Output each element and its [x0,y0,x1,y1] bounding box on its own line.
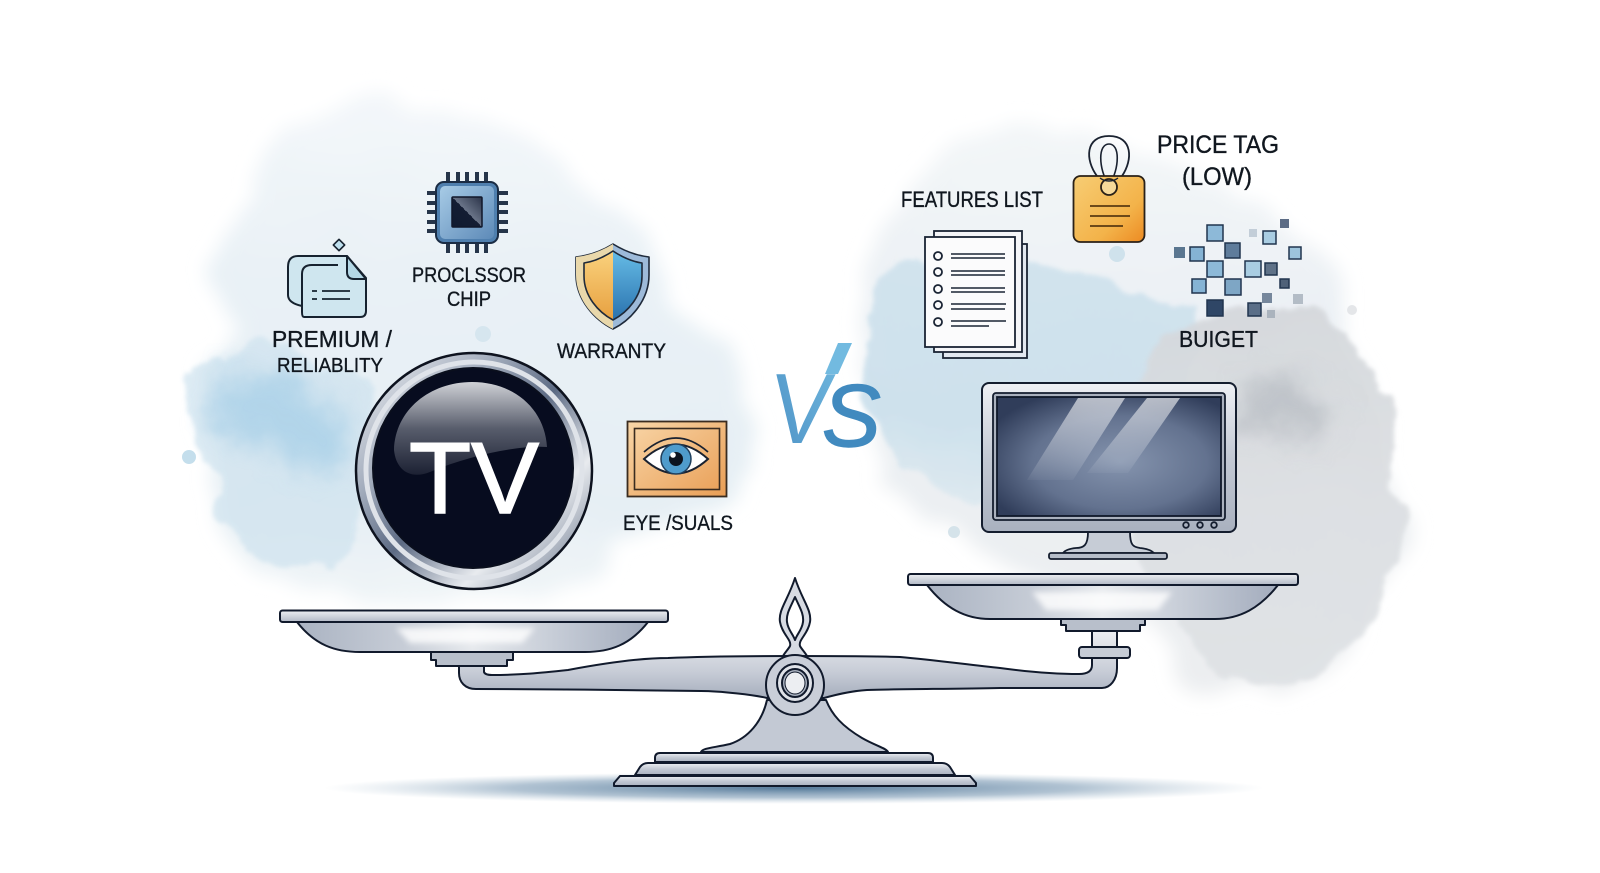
label: warranty: WARRANTY [557,340,666,363]
ground shadow [324,772,1264,804]
label: budget: BUIGET [1179,326,1258,352]
balance scale [280,574,1298,786]
scale beam [459,631,1117,698]
scale finial [780,578,810,660]
VS label: S [822,366,881,465]
icon: premium reliability document [288,239,366,317]
label: premium reliability [272,326,393,377]
icon: price tag [1074,136,1144,242]
icon: budget pixel squares [1174,219,1303,318]
icon: eye visuals [628,422,726,496]
icon: warranty shield [576,244,649,329]
icon: monitor [982,383,1236,559]
left pan [280,610,668,666]
VS label: V [764,353,839,465]
icon: TV badge [356,353,592,589]
VS label [764,343,881,465]
label: processor chip: CHIP [447,288,491,311]
scale stand [701,700,888,752]
label: price tag low: PRICE TAG [1157,131,1279,159]
label: processor chip [412,264,526,311]
watercolor wash: left [182,103,753,603]
text: TV: TV [409,423,539,535]
label: features list: FEATURES LIST [901,187,1043,212]
label: premium reliability: RELIABLITY [277,355,383,377]
watercolor wash: right [860,133,1410,694]
scale base tiers [614,753,976,786]
label: eye visuals: EYE /SUALS [623,512,733,535]
icon: processor chip [427,172,508,253]
label: price tag low [1157,131,1279,191]
right pan [908,574,1298,658]
label: processor chip: PROCLSSOR [412,264,526,287]
label: price tag low: (LOW) [1182,163,1252,191]
scale pivot [766,655,824,715]
label: premium reliability: PREMIUM / [272,326,393,352]
icon: features list pages [925,231,1027,358]
